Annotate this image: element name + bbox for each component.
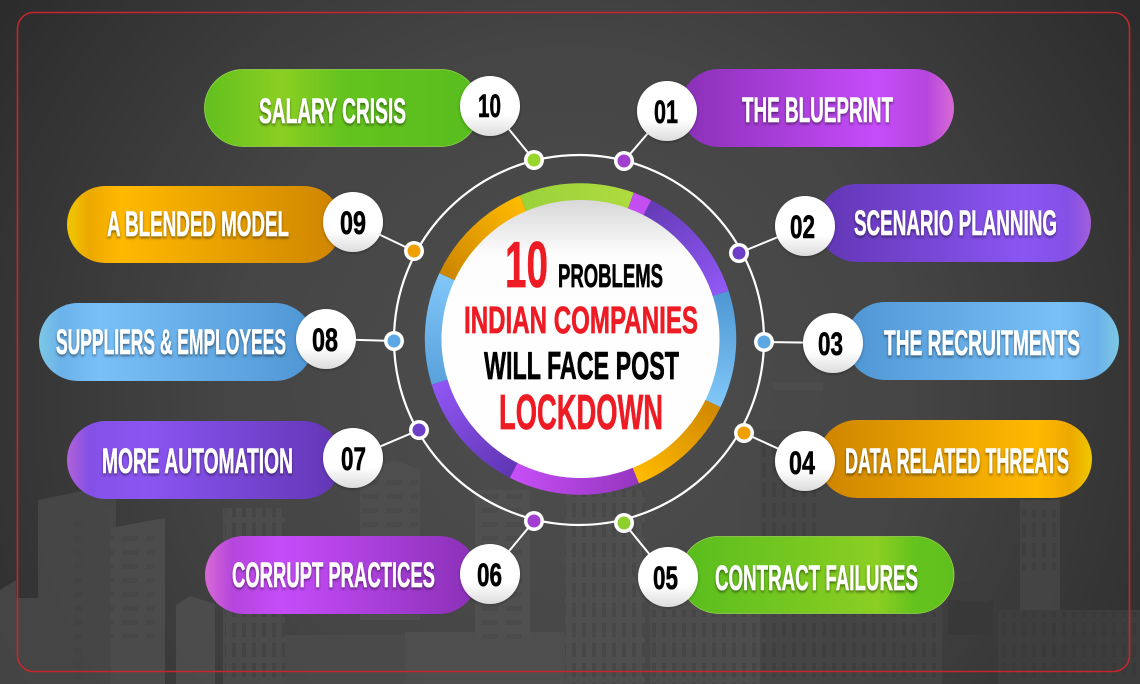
item 07: more automation: MORE AUTOMATION (102, 442, 293, 481)
title: 10 (505, 228, 548, 301)
item 07: more automation: 07 (341, 441, 366, 477)
title (464, 228, 698, 440)
item 08: suppliers and employees: 08 (312, 322, 338, 358)
outer ring (394, 155, 764, 525)
item 05: contract failures (614, 513, 954, 614)
item 09: a blended model (67, 186, 424, 263)
connector lines (326, 106, 833, 577)
item 01: the blueprint: 01 (654, 94, 678, 130)
item 10: salary crisis: SALARY CRISIS (259, 92, 406, 131)
item 09: a blended model: 09 (340, 205, 366, 241)
item 01: the blueprint: THE BLUEPRINT (742, 91, 893, 130)
item 05: contract failures: 05 (653, 560, 678, 596)
item 02: scenario planning (729, 184, 1091, 263)
item 03: the recruitments (754, 302, 1119, 380)
item 06: corrupt practices: 06 (477, 557, 502, 593)
city skyline (0, 382, 1140, 684)
item 07: more automation (67, 420, 429, 499)
item 02: scenario planning: 02 (790, 209, 815, 245)
item 10: salary crisis: 10 (478, 88, 501, 124)
item 01: the blueprint (614, 69, 954, 171)
title: INDIAN COMPANIES (464, 300, 698, 342)
item 09: a blended model: A BLENDED MODEL (107, 205, 289, 244)
item 08: suppliers and employees (39, 303, 404, 381)
item 04: data related threats: 04 (789, 445, 815, 481)
title: WILL FACE POST (484, 345, 679, 388)
item 10: salary crisis (204, 70, 544, 170)
item 05: contract failures: CONTRACT FAILURES (715, 559, 918, 598)
item 08: suppliers and employees: SUPPLIERS & EMPLOYEES (56, 323, 286, 362)
item 06: corrupt practices: CORRUPT PRACTICES (232, 556, 435, 595)
segmented ring (434, 192, 727, 486)
item 03: the recruitments: 03 (818, 326, 843, 362)
title: LOCKDOWN (499, 386, 663, 440)
title: PROBLEMS (558, 258, 663, 294)
centre disc (442, 200, 720, 478)
item 06: corrupt practices (205, 511, 544, 614)
item 04: data related threats (734, 420, 1092, 498)
